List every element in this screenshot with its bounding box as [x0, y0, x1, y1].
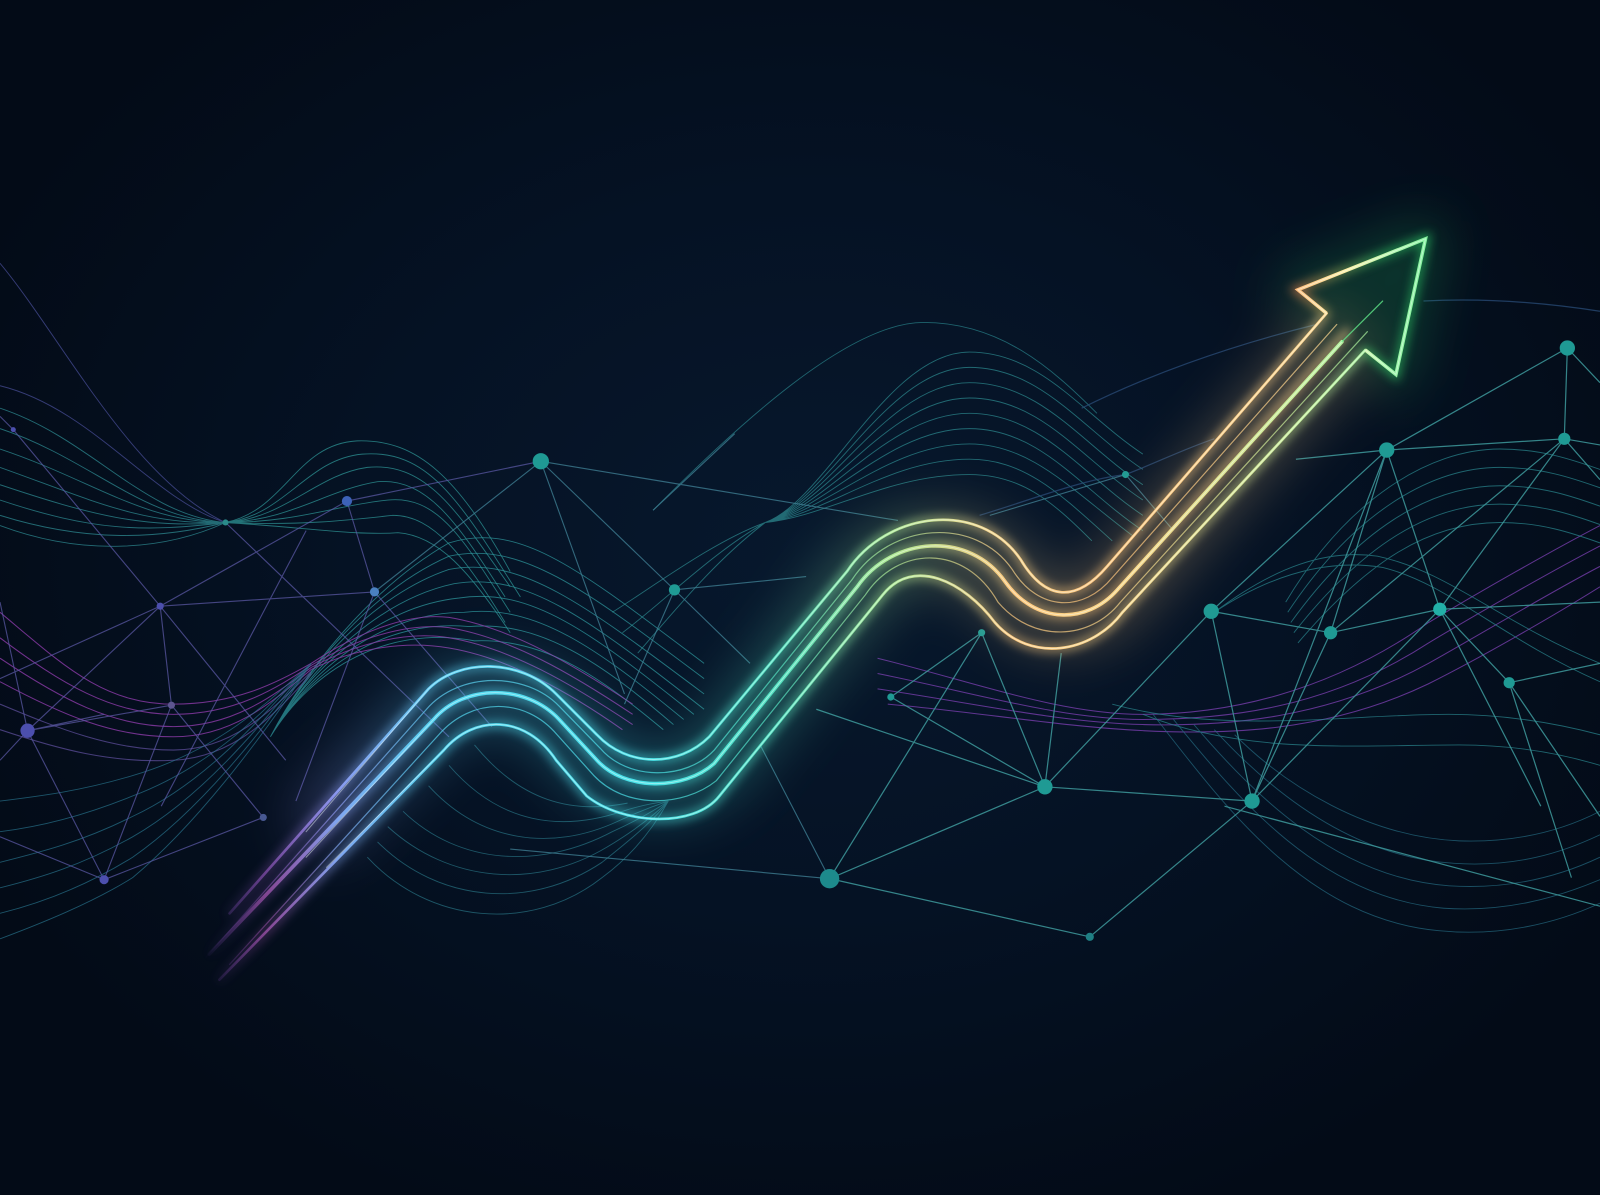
- network nodes: [11, 340, 1575, 941]
- faint long curves near arrow: [980, 300, 1600, 515]
- line: lower inner: [230, 332, 1367, 964]
- wave mesh: purple ribbon right: [878, 526, 1600, 732]
- wave mesh: rising teal hump: [270, 538, 704, 737]
- line: bottom edge: [219, 350, 1365, 980]
- wave mesh: lower left teal fan: [0, 663, 311, 939]
- node cluster: left purple: [11, 427, 379, 884]
- network edges: right teal: [816, 348, 1600, 937]
- line: top edge: [230, 313, 1327, 913]
- network edges: centre: [374, 434, 1173, 879]
- line: bright middle: [209, 342, 1342, 954]
- arrow: ambient glow: [306, 238, 1427, 837]
- arrow: white-hot core highlights: [306, 239, 1426, 867]
- line: arrow shaft tip streak: [1342, 301, 1383, 342]
- wave mesh: left teal fan: [0, 263, 520, 633]
- wave mesh: central tall hump: [612, 322, 1143, 653]
- wave mesh: purple ribbon left: [0, 612, 633, 761]
- line: upper inner: [204, 325, 1337, 959]
- wave mesh: right teal hump: [1112, 449, 1600, 765]
- wave mesh: arcs under first hump: [367, 745, 668, 914]
- node cluster: teal: [533, 340, 1575, 941]
- network edges: left purple: [0, 416, 541, 880]
- arrow: soft halo: [209, 238, 1427, 980]
- wave mesh: lower right fan: [1153, 714, 1600, 932]
- arrow: neon lines: [204, 239, 1426, 980]
- arrowhead outline: [1298, 239, 1426, 375]
